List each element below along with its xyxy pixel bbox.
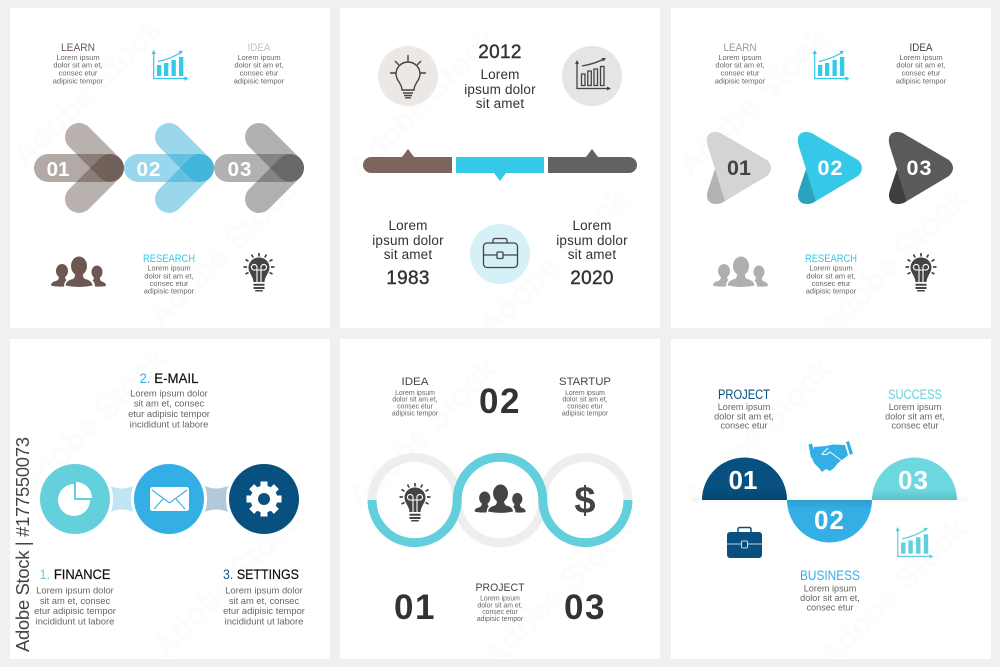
heading: business: BUSINESS — [800, 568, 860, 583]
heading: business: dolor sit am et, — [800, 593, 860, 603]
text: Adobe Stock — [675, 350, 839, 514]
heading: research: consec etur — [150, 279, 189, 288]
icon: light bulb — [906, 253, 936, 292]
half circle 01 — [702, 458, 787, 500]
heading: research: dolor sit am et, — [144, 271, 194, 280]
heading: learn: adipisic tempor — [53, 76, 104, 85]
triangle 02 — [798, 132, 862, 204]
panel: transparent arrows — [47, 42, 290, 296]
heading: settings: Lorem ipsum dolor — [225, 585, 303, 596]
heading: learn: LEARN — [724, 42, 757, 54]
timeline segment: brown — [363, 149, 452, 173]
heading: success — [885, 387, 945, 431]
heading: research: dolor sit am et, — [806, 271, 856, 280]
text: Adobe Stock — [5, 10, 169, 174]
text: 1983 — [372, 218, 444, 289]
heading: settings — [223, 567, 305, 626]
heading: idea: consec etur — [240, 68, 279, 77]
number 01: 01 — [394, 588, 436, 627]
heading: idea: Lorem ipsum — [237, 53, 281, 62]
icon: light bulb — [244, 253, 274, 292]
text: 2020: 2020 — [570, 268, 614, 289]
text: Adobe Stock — [145, 500, 309, 664]
half circle 01: 01 — [729, 465, 757, 495]
heading: startup: STARTUP — [559, 376, 611, 388]
heading: idea: Lorem ipsum — [395, 390, 435, 397]
heading: research: RESEARCH — [805, 253, 857, 265]
panel: timeline — [363, 42, 637, 289]
icon: people — [713, 256, 768, 287]
text: Adobe Stock — [670, 20, 834, 184]
heading: 2012: sit amet — [476, 96, 524, 111]
heading: settings: sit am et, consec — [229, 595, 299, 606]
heading: research: adipisic tempor — [806, 287, 857, 296]
half circle 02: 02 — [814, 505, 845, 535]
text: 2020 — [556, 218, 628, 289]
heading: learn: Lorem ipsum — [718, 53, 762, 62]
heading: idea: consec etur — [397, 403, 434, 410]
half circle 02 — [787, 500, 872, 542]
heading: project: PROJECT — [476, 582, 525, 594]
half circle 03: 03 — [898, 465, 929, 495]
text: 1983: ipsum dolor — [372, 233, 444, 248]
number 03: 03 — [564, 588, 606, 627]
heading: idea — [234, 42, 285, 85]
heading: 2012 — [464, 42, 536, 111]
heading: research: RESEARCH — [143, 253, 195, 265]
heading: project: dolor sit am et, — [477, 602, 523, 609]
icon: chart outline — [562, 46, 622, 106]
arrow 02 — [137, 137, 200, 199]
shadow line — [692, 498, 968, 500]
heading: project — [476, 582, 525, 623]
arrow 03: 03 — [228, 158, 252, 181]
heading: research: adipisic tempor — [144, 287, 195, 296]
circle: e-mail with envelope icon — [134, 464, 204, 534]
icon: people — [51, 256, 106, 287]
heading: learn: LEARN — [61, 42, 95, 54]
icon: people — [474, 485, 526, 513]
heading: e-mail: 2. E-MAIL — [140, 371, 199, 386]
heading: finance: incididunt ut labore — [36, 615, 114, 626]
timeline segment: gray — [548, 149, 637, 173]
heading: project: PROJECT — [718, 387, 770, 402]
heading: finance: Lorem ipsum dolor — [36, 585, 114, 596]
heading: success: consec etur — [891, 421, 939, 431]
panel: linked circles — [34, 371, 305, 626]
heading: e-mail: Lorem ipsum dolor — [130, 388, 208, 399]
triangle 02: 02 — [818, 156, 843, 180]
icon: light bulb outline — [378, 46, 438, 106]
heading: startup: Lorem ipsum — [565, 390, 605, 397]
heading: idea: IDEA — [248, 42, 271, 54]
text: 1983: 1983 — [386, 268, 430, 289]
heading: project: consec etur — [720, 421, 768, 431]
icon: dollar: $ — [574, 480, 596, 522]
heading: startup: dolor sit am et, — [562, 397, 608, 404]
text: 2020: sit amet — [568, 247, 616, 262]
heading: project: adipisic tempor — [477, 616, 524, 623]
arrow 01: 01 — [47, 158, 69, 181]
circle: finance with pie icon — [40, 464, 110, 534]
connector: dark — [205, 486, 228, 512]
heading: e-mail — [128, 371, 210, 429]
icon: growth chart — [895, 527, 934, 559]
heading: learn — [53, 42, 104, 85]
triangle 03 — [889, 132, 953, 204]
heading: research: Lorem ipsum — [809, 264, 853, 273]
heading: finance — [34, 567, 116, 626]
heading: learn: consec etur — [721, 68, 760, 77]
arrow 03 — [228, 137, 290, 199]
heading: idea — [392, 376, 439, 417]
heading: idea: consec etur — [902, 68, 941, 77]
panel: wave rings — [372, 376, 628, 627]
heading: success: dolor sit am et, — [885, 411, 945, 421]
heading: settings: 3. SETTINGS — [223, 567, 299, 582]
heading: project: Lorem ipsum — [480, 596, 520, 603]
heading: idea: Lorem ipsum — [899, 53, 943, 62]
connector: light — [111, 486, 133, 512]
text: 1983: sit amet — [384, 247, 432, 262]
heading: startup — [559, 376, 611, 417]
text: 1983: Lorem — [388, 218, 428, 233]
heading: e-mail: incididunt ut labore — [130, 418, 208, 429]
heading: learn: dolor sit am et, — [715, 61, 765, 70]
heading: idea: dolor sit am et, — [896, 61, 946, 70]
heading: business: Lorem ipsum — [804, 584, 856, 594]
heading: idea: IDEA — [910, 42, 933, 54]
icon: briefcase outline — [470, 224, 530, 284]
icon: growth chart — [151, 50, 188, 81]
icon: light bulb — [400, 483, 430, 522]
arrow 01 — [47, 137, 110, 199]
timeline segment: blue — [456, 157, 544, 181]
text: Adobe Stock — [810, 180, 974, 344]
heading: finance: etur adipisic tempor — [34, 605, 116, 616]
heading: 2012: ipsum dolor — [464, 82, 536, 97]
stock id label: Adobe Stock | #177550073 — [12, 437, 33, 652]
heading: idea: dolor sit am et, — [234, 61, 284, 70]
heading: idea: adipisic tempor — [392, 410, 439, 417]
icon: briefcase — [727, 528, 762, 558]
triangle 01 — [707, 132, 771, 204]
heading: project — [714, 387, 774, 431]
heading: idea: adipisic tempor — [234, 76, 285, 85]
heading: business — [800, 568, 860, 612]
heading: e-mail: etur adipisic tempor — [128, 408, 210, 419]
icon: growth chart — [812, 50, 850, 81]
heading: success: Lorem ipsum — [889, 402, 941, 412]
heading: research: consec etur — [812, 279, 851, 288]
triangle 03: 03 — [907, 156, 932, 180]
heading: 2012: 2012 — [478, 42, 522, 63]
number 02: 02 — [479, 382, 521, 421]
text: Adobe Stock — [10, 340, 174, 504]
heading: research — [805, 253, 857, 296]
rings — [372, 457, 628, 543]
triangle 01: 01 — [727, 156, 751, 180]
panel: rounded triangles — [707, 42, 953, 296]
heading: idea: dolor sit am et, — [392, 397, 438, 404]
heading: learn: adipisic tempor — [715, 76, 766, 85]
heading: finance: 1. FINANCE — [40, 567, 110, 582]
text: 2020: Lorem — [572, 218, 612, 233]
heading: learn — [715, 42, 766, 85]
text: Adobe Stock — [340, 350, 504, 514]
heading: idea — [896, 42, 947, 85]
icon: handshake — [808, 441, 853, 472]
text: Adobe Stock — [340, 20, 504, 184]
text: Adobe Stock — [140, 170, 304, 334]
heading: idea: adipisic tempor — [896, 76, 947, 85]
heading: settings: etur adipisic tempor — [223, 605, 305, 616]
heading: 2012: Lorem — [480, 67, 520, 82]
text: 2020: ipsum dolor — [556, 233, 628, 248]
half circle 03 — [872, 458, 957, 500]
heading: project: consec etur — [482, 609, 519, 616]
heading: startup: adipisic tempor — [562, 410, 609, 417]
panel: half circles — [692, 387, 968, 612]
heading: business: consec etur — [806, 602, 854, 612]
heading: finance: sit am et, consec — [40, 595, 110, 606]
heading: research: Lorem ipsum — [147, 264, 191, 273]
heading: learn: consec etur — [59, 68, 98, 77]
arrow 02: 02 — [137, 158, 161, 181]
heading: project: Lorem ipsum — [718, 402, 770, 412]
heading: research — [143, 253, 195, 296]
text: Adobe Stock — [470, 180, 634, 344]
heading: learn: dolor sit am et, — [53, 61, 103, 70]
heading: project: dolor sit am et, — [714, 411, 774, 421]
circle: settings with gear icon — [229, 464, 299, 534]
heading: e-mail: sit am et, consec — [134, 398, 204, 409]
heading: settings: incididunt ut labore — [225, 615, 303, 626]
heading: success: SUCCESS — [888, 387, 942, 402]
heading: idea: IDEA — [402, 376, 429, 388]
heading: startup: consec etur — [567, 403, 604, 410]
heading: learn: Lorem ipsum — [56, 53, 100, 62]
